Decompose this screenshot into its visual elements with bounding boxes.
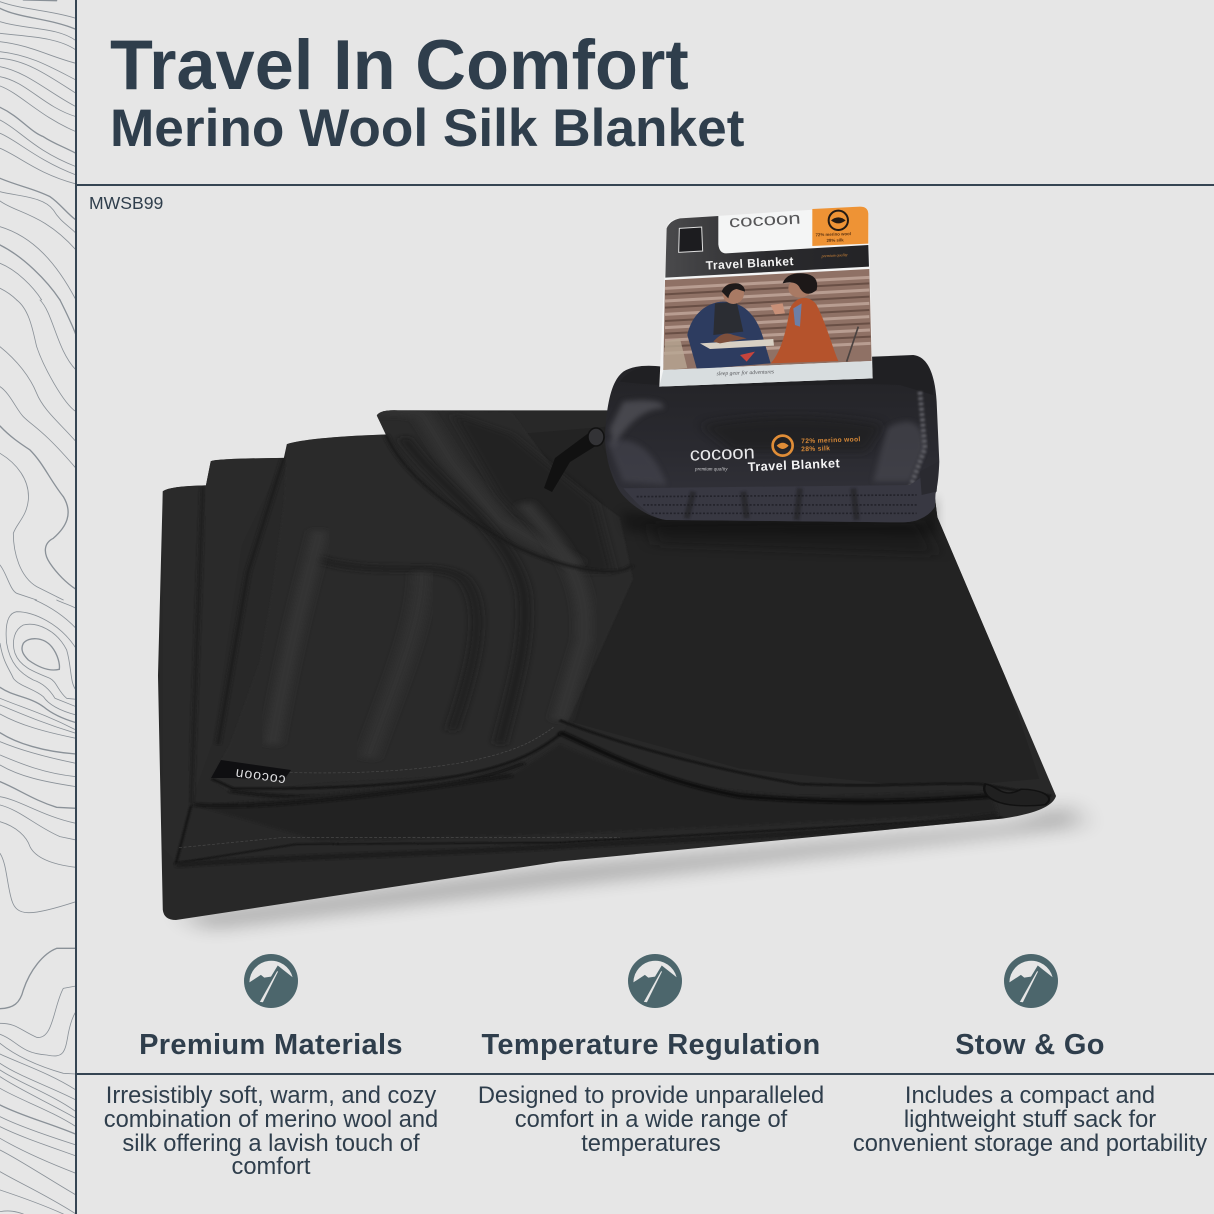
card footer: sleep gear for adventures: [716, 368, 775, 377]
folded blanket: [158, 410, 1081, 930]
product code: MWSB99: [89, 193, 163, 213]
text: premium materials: [104, 1083, 438, 1180]
header card: premium quality: [820, 252, 848, 258]
right panel: [935, 499, 1008, 683]
header card: Travel Blanket: [705, 254, 794, 273]
sack logo and label: 28% silk: [801, 445, 830, 453]
card orange badge: 28% silk: [827, 237, 844, 243]
card orange badge: [812, 207, 868, 246]
text: temperature regulation: [478, 1083, 824, 1156]
text: temperature regulation: temperatures: [581, 1130, 721, 1156]
text: stow and go: convenient storage and portability: [853, 1130, 1207, 1156]
lower fold shadows: [300, 796, 338, 798]
header card: [659, 207, 873, 387]
text: temperature regulation: comfort in a wide range of: [515, 1107, 787, 1133]
text: stow and go: lightweight stuff sack for: [904, 1107, 1156, 1133]
card orange badge: 72% merino wool: [816, 231, 851, 237]
heading: stow and go: Stow & Go: [955, 1029, 1105, 1061]
text: premium materials: Irresistibly soft, warm, and cozy: [106, 1083, 436, 1109]
text: temperature regulation: Designed to provide unparalleled: [478, 1083, 824, 1109]
woven cocoon tag: [211, 760, 291, 789]
topographic contour strip: [0, 0, 75, 1214]
woven cocoon tag: cocoon: [234, 766, 286, 789]
sack logo and label: [689, 436, 861, 474]
text: stow and go: [853, 1083, 1207, 1156]
sack logo and label: 72% merino wool: [801, 436, 861, 445]
mesh base strip: [623, 467, 937, 522]
sack logo and label: cocoon: [689, 441, 755, 465]
title: Travel In Comfort: [110, 25, 689, 104]
icon: mountain badge, temperature regulation: [628, 954, 682, 1008]
card footer: [659, 361, 873, 387]
subtitle: Merino Wool Silk Blanket: [110, 99, 744, 158]
card dark band: [665, 216, 869, 278]
text: premium materials: silk offering a lavish touch of: [122, 1130, 420, 1156]
icon: mountain badge, stow and go: [1004, 954, 1058, 1008]
product photo: blanket, stuff sack and card: [158, 206, 1089, 936]
sack logo and label: premium quality: [694, 468, 728, 473]
icon: mountain badge, premium materials: [244, 954, 298, 1008]
sack logo and label: Travel Blanket: [748, 456, 841, 474]
heading: premium materials: Premium Materials: [139, 1029, 403, 1061]
text: stow and go: Includes a compact and: [905, 1083, 1155, 1109]
header card: cocoon: [729, 209, 801, 231]
drawstring toggle: [544, 428, 604, 492]
text: premium materials: comfort: [232, 1154, 310, 1180]
stuff sack: [605, 355, 939, 535]
text: premium materials: combination of merino wool and: [104, 1107, 438, 1133]
front drape: [286, 410, 631, 676]
back layers: [162, 458, 274, 500]
heading: temperature regulation: Temperature Regulation: [481, 1029, 821, 1061]
card photo: [663, 269, 872, 370]
